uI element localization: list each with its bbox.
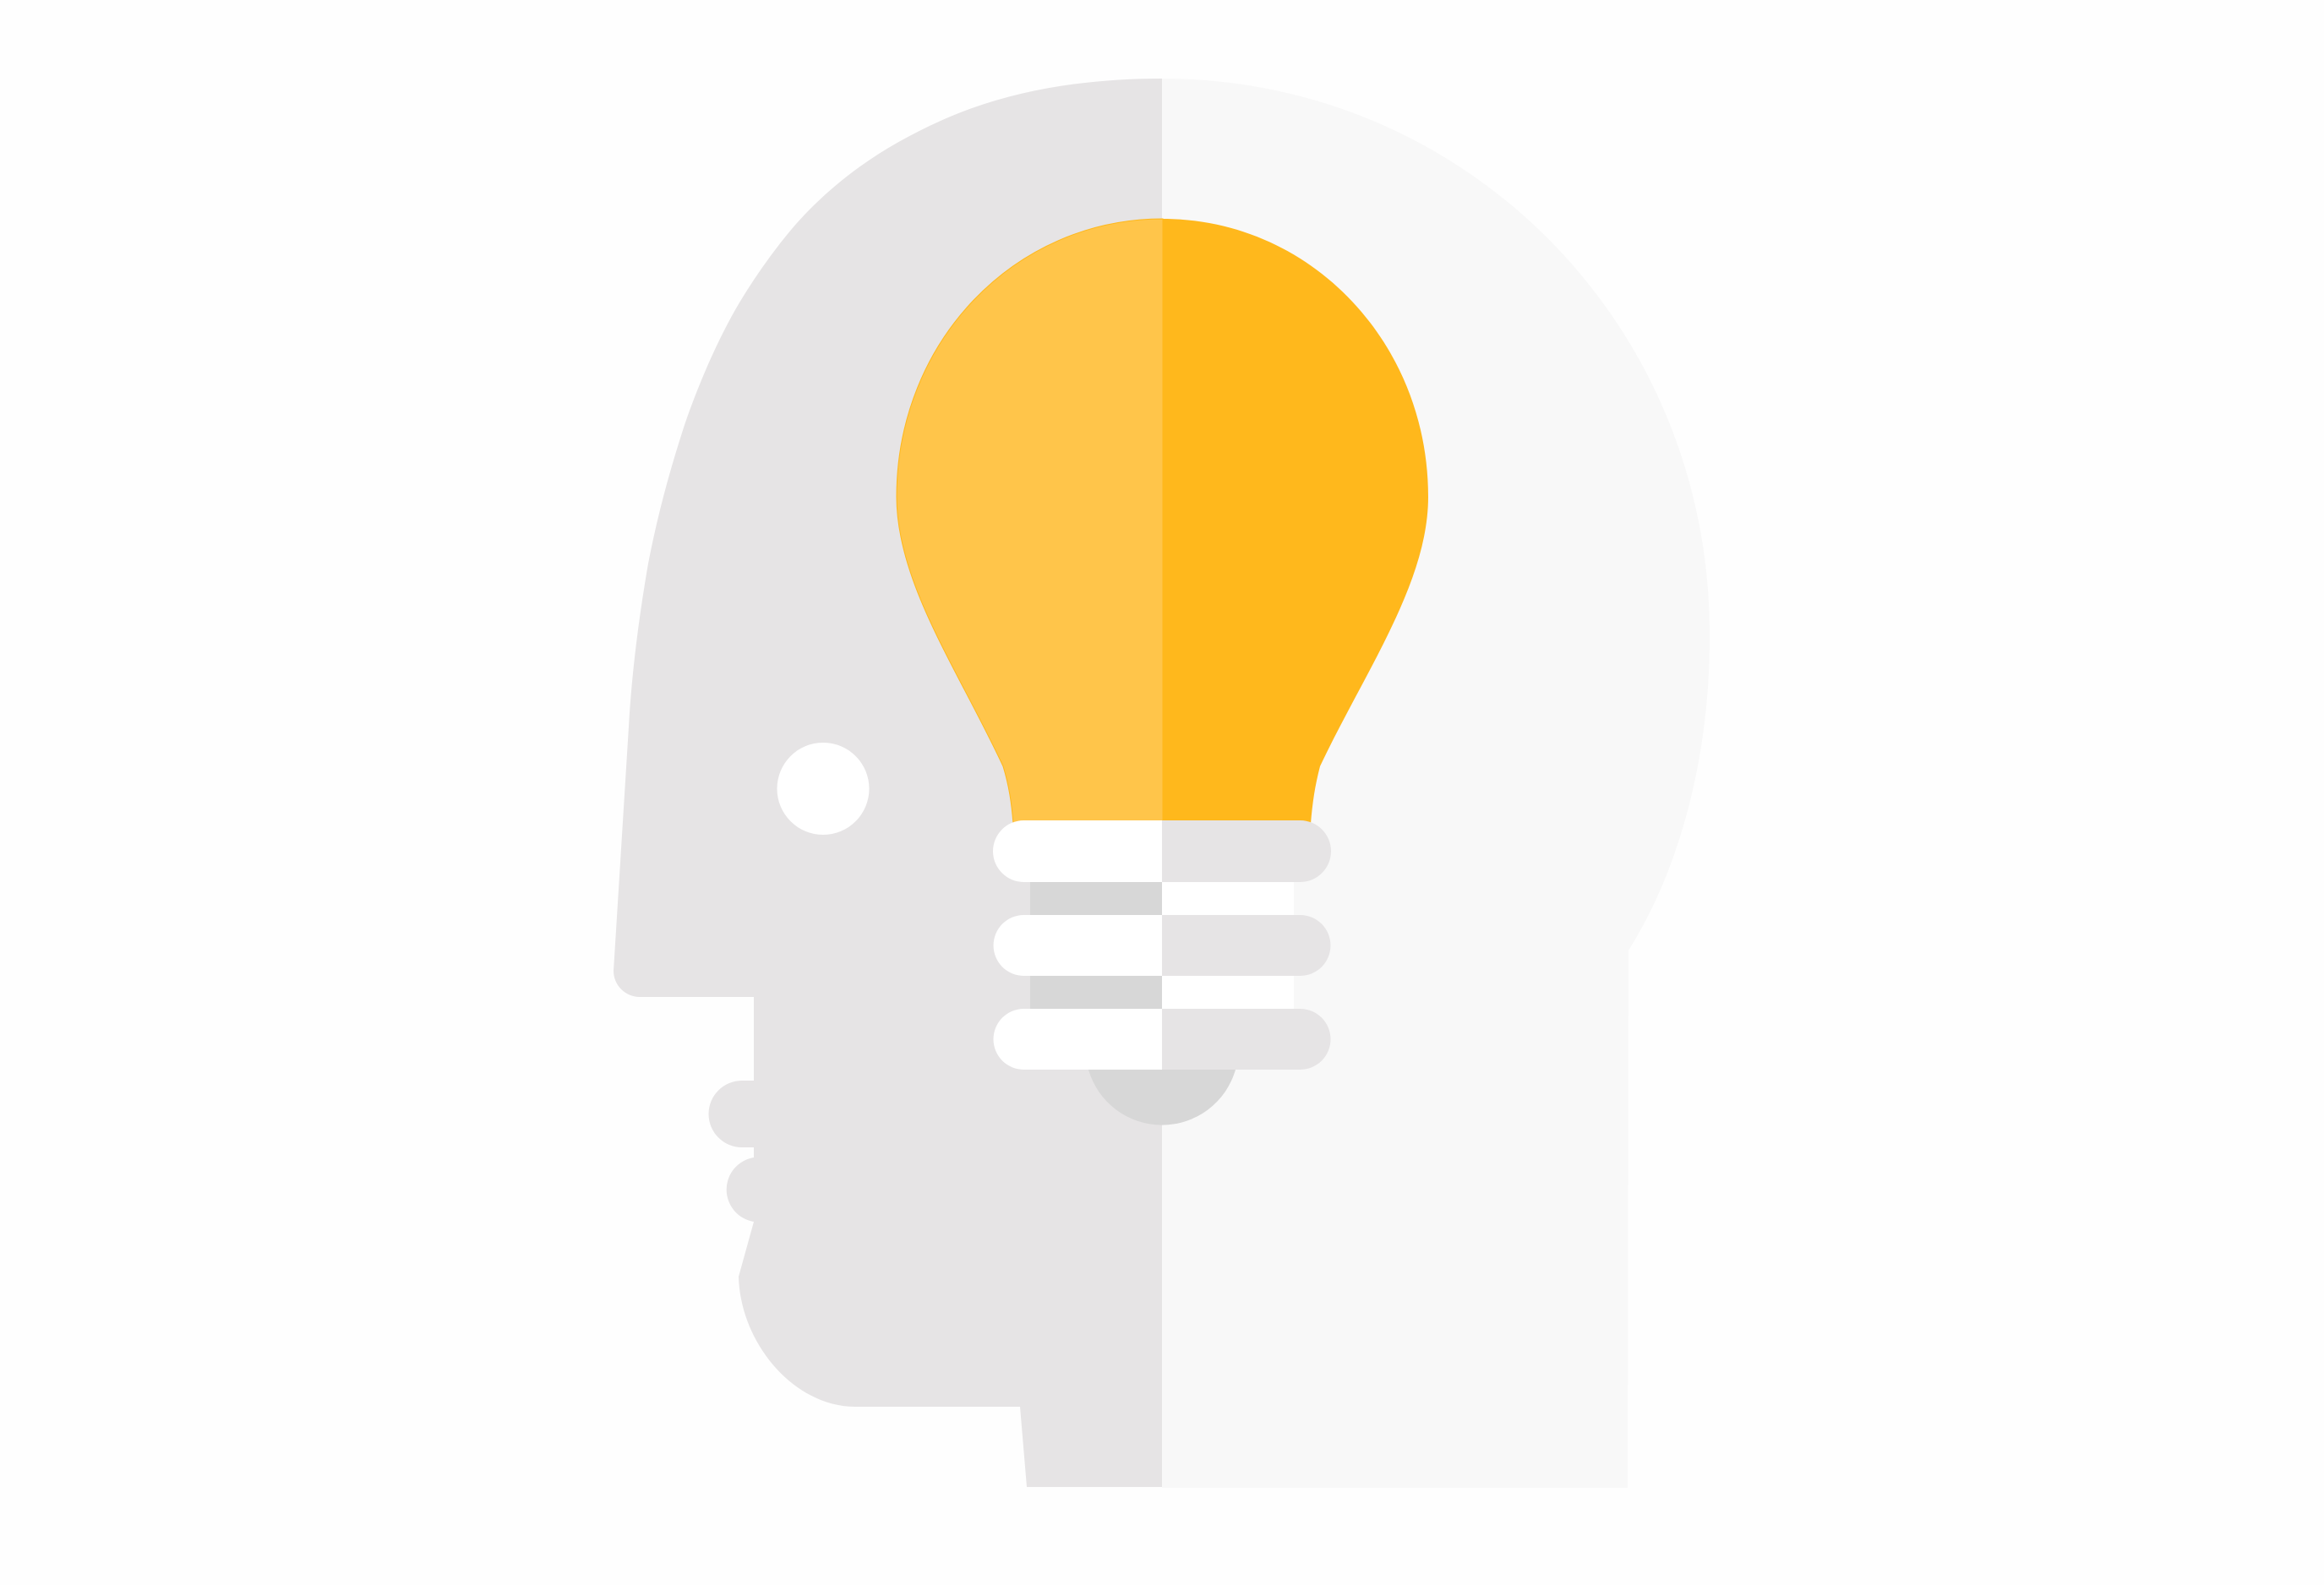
light bulb xyxy=(897,219,1428,1125)
eye xyxy=(777,743,869,835)
bulb base cap xyxy=(1088,1070,1236,1125)
bulb glass: left half xyxy=(897,219,1163,824)
bulb neck: left xyxy=(1030,879,1162,1012)
bulb glass: right half xyxy=(1163,219,1428,824)
screw thread 2 xyxy=(994,915,1330,976)
screw thread 3 xyxy=(994,1009,1330,1070)
bulb neck: right xyxy=(1162,879,1294,1012)
head: left half xyxy=(614,79,1162,1487)
screw thread 1 xyxy=(993,820,1331,882)
head: right half xyxy=(1162,79,1710,1488)
head silhouette xyxy=(614,79,1710,1488)
